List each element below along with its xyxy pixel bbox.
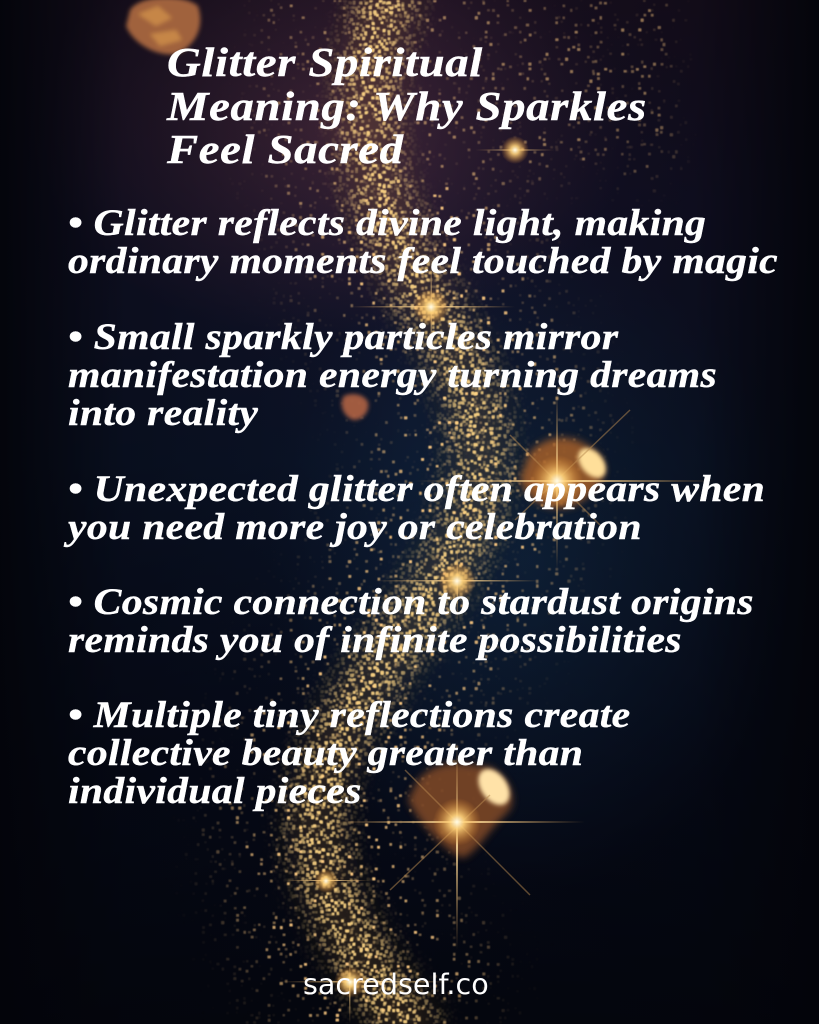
bullet: divine light: [68, 203, 778, 282]
title: Meaning: Why Sparkles: [167, 82, 647, 128]
bokeh mid right: [520, 438, 611, 508]
star: bottom: [280, 955, 450, 1024]
bullet: collective beauty: • Multiple tiny reflections create: [68, 695, 630, 736]
bokeh small: [342, 394, 368, 420]
bullet: manifestation: manifestation energy turning dreams: [68, 355, 717, 396]
bullet: manifestation: [68, 317, 717, 434]
bullet: joy: • Unexpected glitter often appears when: [68, 469, 765, 510]
glitter stream glow: [317, 0, 480, 1024]
bullet: collective beauty: individual pieces: [68, 771, 362, 812]
title: [166, 39, 647, 172]
bullet: joy: [64, 469, 765, 548]
star: small lower: [285, 869, 370, 893]
bullet: joy: you need more joy or celebration: [68, 507, 642, 548]
star: top: [475, 136, 555, 164]
bullet: collective beauty: [68, 695, 630, 812]
bokeh lower right: [408, 763, 516, 858]
bullet: manifestation: • Small sparkly particles mirror: [68, 317, 618, 358]
title: Glitter Spiritual: [167, 39, 483, 85]
bullet: collective beauty: collective beauty greater than: [68, 733, 583, 774]
footer url: sacredself.co: [303, 967, 489, 1001]
star: middle right: [415, 390, 715, 570]
star: upper centre: [350, 255, 515, 360]
bullet: manifestation: into reality: [68, 393, 258, 434]
bokeh top left: [126, 0, 200, 54]
star flares: [280, 136, 715, 1024]
bullet: cosmic connection: [68, 582, 754, 661]
bullet: cosmic connection: reminds you of infinite possibilities: [68, 620, 682, 661]
star: big lower: [335, 740, 585, 950]
glitter particles, dense stream: [269, 0, 528, 1024]
star: lower centre: [375, 545, 540, 625]
bullet: divine light: • Glitter reflects divine light, making: [68, 203, 706, 244]
title: Feel Sacred: [167, 126, 404, 172]
bullet: cosmic connection: • Cosmic connection to stardust origins: [68, 582, 754, 623]
glitter particles, scattered: [185, 0, 689, 1024]
bullet: divine light: ordinary moments feel touched by magic: [68, 241, 778, 282]
